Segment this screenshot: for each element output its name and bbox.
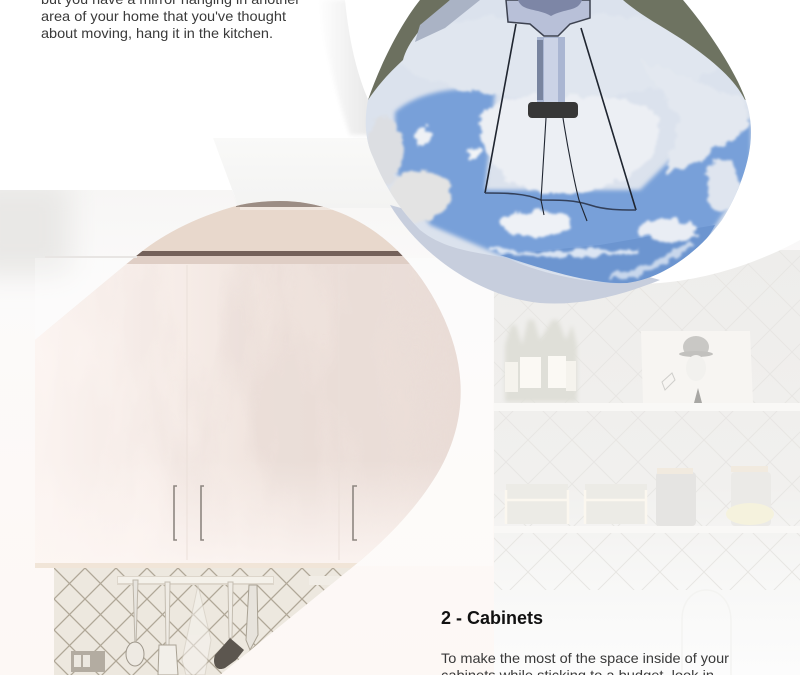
lower kitchen background [0, 180, 800, 675]
cabinet shape [35, 201, 461, 675]
land reflection right [623, 0, 746, 100]
bulb shadow [390, 205, 660, 304]
large white circle [345, 0, 800, 284]
land reflection left [360, 0, 450, 100]
white top left panel [0, 0, 330, 208]
socket [506, 0, 590, 36]
hanging utensils [126, 580, 258, 675]
cabinet handles [174, 486, 357, 540]
section text: mirror tip [41, 0, 300, 41]
section text: cabinets tip: To make the most of the space inside of your [441, 650, 729, 666]
heading: 2 - Cabinets: 2 - Cabinets [441, 608, 543, 628]
tile backsplash [54, 568, 374, 675]
framed portrait [641, 331, 753, 403]
glass jars [656, 466, 774, 526]
blue sky [395, 89, 751, 285]
lower shelf [494, 526, 800, 533]
soft shade beside circle [318, 0, 378, 135]
cabinet door lines [187, 265, 339, 560]
utensil rail [117, 576, 349, 585]
section text: mirror tip: area of your home that you've thought [41, 8, 286, 24]
spice racks [506, 484, 647, 524]
support wires [485, 24, 636, 221]
filament bar [528, 102, 578, 118]
mottled cabinet texture [0, 260, 520, 570]
wine bottles [505, 320, 577, 402]
section text: cabinets tip [441, 650, 729, 675]
translucent cabinet box [35, 258, 493, 566]
bulb filament and stem [485, 0, 636, 221]
faint crown line outside cabinet [45, 256, 137, 258]
clouds [368, 85, 750, 281]
light switch [71, 651, 105, 672]
light bulb [366, 0, 751, 284]
kitchen wall with shelves [494, 250, 800, 675]
gray wedge behind circle [213, 138, 420, 208]
glass stem [537, 37, 565, 103]
cabinet crown [142, 206, 398, 251]
section text: mirror tip: about moving, hang it in the kitchen. [41, 25, 273, 41]
faucet outline [682, 590, 731, 675]
upper shelf [494, 403, 800, 411]
